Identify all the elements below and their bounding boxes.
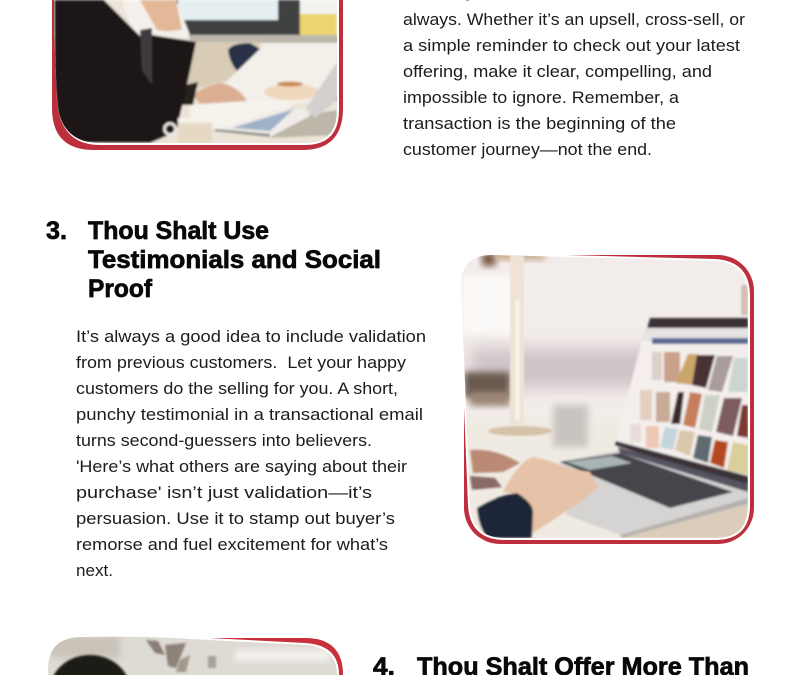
hands <box>470 450 520 473</box>
paragraph: commandment 2 closing text: a simple reminder to check out your latest <box>403 36 740 55</box>
paragraph: commandment 2 closing text <box>403 0 745 159</box>
paragraph: commandment 3 body: 'Here’s what others are saying about their <box>76 457 407 476</box>
paragraph: commandment 2 closing text: always. Whether it’s an upsell, cross-sell, or <box>403 10 745 29</box>
heading: commandment 3 <box>46 217 381 303</box>
heading: commandment 3: Proof <box>88 275 153 303</box>
photo: hands on laptop showing image gallery <box>455 250 755 545</box>
paragraph: commandment 3 body: customers do the selling for you. A short, <box>76 379 398 398</box>
paragraph: commandment 2 closing text: transaction is the beginning of the <box>403 114 676 133</box>
paragraph: commandment 3 body <box>76 327 426 580</box>
heading: commandment 3: Thou Shalt Use <box>88 217 269 245</box>
paragraph: commandment 3 body: from previous customers. Let your happy <box>76 353 407 372</box>
paragraph: commandment 3 body: next. <box>76 561 113 580</box>
paragraph: commandment 3 body: turns second-guessers into believers. <box>76 431 372 450</box>
heading: commandment 3: 3. <box>46 217 67 245</box>
paragraph: commandment 2 closing text: customer journey—not the end. <box>403 140 652 159</box>
laptop base <box>560 450 748 535</box>
paragraph: commandment 2 closing text: offering, make it clear, compelling, and <box>403 62 712 81</box>
photo: businessman at laptop <box>50 0 343 150</box>
paragraph: commandment 2 closing text: impossible to ignore. Remember, a <box>403 88 680 107</box>
paragraph: commandment 3 body: It’s always a good idea to include validation <box>76 327 426 346</box>
paragraph: commandment 3 body: punchy testimonial in a transactional email <box>76 405 423 424</box>
heading: commandment 3: Testimonials and Social <box>88 246 381 274</box>
photo: commandment 4 image (top edge) <box>45 635 343 675</box>
laptop lid <box>615 318 748 490</box>
paragraph: commandment 3 body: purchase' isn’t just validation—it’s <box>76 483 372 502</box>
paragraph: commandment 3 body: remorse and fuel excitement for what’s <box>76 535 388 554</box>
paragraph: commandment 3 body: persuasion. Use it to stamp out buyer’s <box>76 509 395 528</box>
